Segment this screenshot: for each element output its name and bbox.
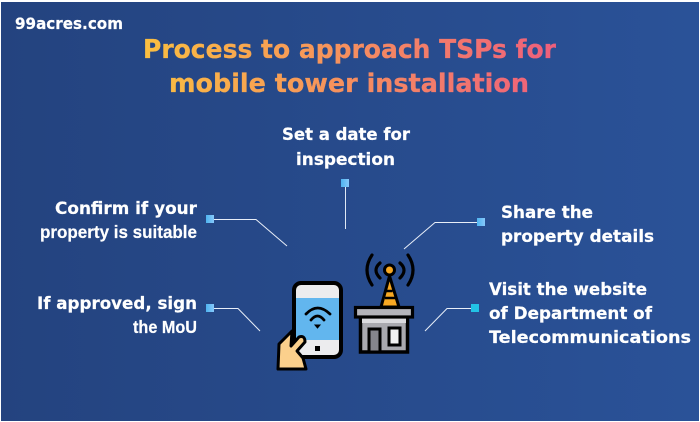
step: set a date for inspection: inspection [296,150,395,169]
icon: wifi symbol [306,308,330,328]
icon: building [360,317,408,352]
step: if approved, sign the MoU: If approved, sign [37,294,197,313]
title [143,35,556,99]
step: confirm if your property is suitable: property is suitable [40,222,197,242]
step: set a date for inspection [282,125,411,229]
title: mobile tower installation [169,69,529,99]
icon: antenna [381,276,399,307]
icon: phone with wifi held in hand [278,283,341,369]
step: set a date for inspection: Set a date for [282,125,411,144]
step: visit the website of department of telecommunications: Visit the website [489,280,647,299]
step: confirm if your property is suitable [40,199,287,246]
step: if approved, sign the MoU: the MoU [133,317,197,337]
step: visit the website of department of telecommunications [425,280,691,347]
step: visit the website of department of telecommunications: of Department of [489,304,653,323]
step: share the property details: Share the [501,203,593,222]
step: share the property details: property details [501,227,654,246]
icon: hand [278,331,306,369]
logo: 99acres.com: 99acres.com [15,14,123,33]
step: if approved, sign the MoU [37,294,260,337]
step: visit the website of department of telecommunications: Telecommunications [489,328,691,347]
icon: signal waves [367,255,413,285]
step: confirm if your property is suitable: Confirm if your [55,199,198,218]
step: share the property details [404,203,654,249]
icon: mobile tower on building [356,255,413,352]
title: Process to approach TSPs for [143,35,556,65]
